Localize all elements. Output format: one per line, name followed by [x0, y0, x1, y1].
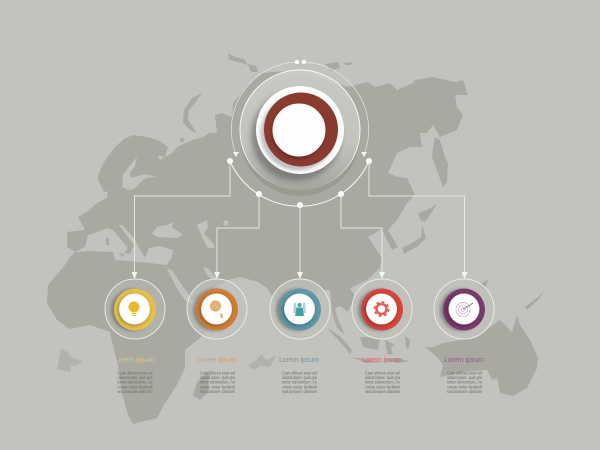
caption 5: Cras ultrices eros vel — [447, 370, 482, 375]
caption 5: tortor elementum. Ae — [447, 380, 483, 385]
icon: bulb — [128, 302, 140, 316]
central hub — [240, 70, 360, 196]
caption 2: ullamcorper, quis gra — [200, 375, 236, 380]
world map — [47, 53, 548, 424]
node 3: teal — [270, 279, 330, 339]
node 2: orange — [187, 279, 247, 339]
hub white centre — [273, 104, 325, 156]
caption 3: ullamcorper, quis gra — [282, 375, 318, 380]
caption 5: Lorem ipsum — [444, 357, 484, 364]
caption 3: Cras ultrices eros vel — [282, 370, 317, 375]
outer thin arc with top dots — [231, 60, 369, 157]
sea: Baltic — [122, 157, 157, 190]
sea: Aral — [223, 220, 229, 226]
caption 5: sed posuere diamom — [447, 389, 482, 394]
hub disc shadow — [251, 91, 341, 181]
caption 1: conse ctetur facilisoli — [118, 384, 153, 389]
sea: Red Sea — [167, 269, 193, 303]
sea: Mediterranean — [75, 225, 173, 265]
caption 3: Lorem ipsum — [279, 357, 319, 364]
caption 4 — [362, 357, 402, 394]
sea: Caspian — [197, 220, 215, 248]
sea: Black Sea — [152, 222, 183, 238]
hub white disc — [256, 86, 344, 174]
hub glass disc — [240, 70, 360, 190]
island clusters — [57, 349, 276, 372]
caption 5: conse ctetur facilisoli — [447, 384, 482, 389]
icon: gear — [374, 302, 388, 316]
node 5: purple — [434, 279, 494, 339]
hub white outline — [240, 70, 360, 190]
hub shadow crescent — [240, 76, 360, 196]
sea: Persian Gulf — [203, 267, 219, 279]
caption 1: sed posuere diamom — [118, 389, 153, 394]
caption 3: tortor elementum. Ae — [282, 380, 318, 385]
hub red ring shadow — [260, 96, 336, 170]
caption 4: tortor elementum. Ae — [365, 380, 401, 385]
node 4: red — [352, 279, 412, 339]
caption 3: sed posuere diamom — [282, 389, 317, 394]
icon: people — [293, 303, 306, 316]
caption 2 — [197, 357, 237, 394]
icon: target with arrow — [456, 302, 473, 316]
caption 2: tortor elementum. Ae — [200, 380, 236, 385]
landmass: Eurasia and Africa — [47, 70, 468, 424]
caption 5: ullamcorper, quis gra — [447, 375, 483, 380]
icon: dotted target — [210, 301, 223, 318]
hub inner shadow — [272, 106, 324, 158]
connectors and arrows — [132, 161, 468, 279]
caption 4: ullamcorper, quis gra — [365, 375, 401, 380]
caption 4: Lorem ipsum — [362, 357, 402, 364]
caption 1: ullamcorper, quis gra — [118, 375, 153, 380]
caption 1: Lorem ipsum — [115, 357, 155, 364]
hub red ring — [264, 92, 338, 166]
node 1: yellow — [105, 279, 165, 339]
caption 1: Cras ultrices eros vel — [118, 370, 153, 375]
caption 2: sed posuere diamom — [200, 389, 235, 394]
caption 4: conse ctetur facilisoli — [365, 384, 400, 389]
caption 4: Cras ultrices eros vel — [365, 370, 400, 375]
caption 1 — [115, 357, 155, 394]
caption 5 — [444, 357, 484, 394]
caption 2: Cras ultrices eros vel — [200, 370, 235, 375]
caption 2: conse ctetur facilisoli — [200, 384, 235, 389]
caption 3: conse ctetur facilisoli — [282, 384, 317, 389]
caption 3 — [279, 357, 319, 394]
caption 4: sed posuere diamom — [365, 389, 400, 394]
lower arc with nodes — [227, 158, 372, 208]
caption 1: tortor elementum. Ae — [118, 380, 153, 385]
caption 2: Lorem ipsum — [197, 357, 237, 364]
islands — [106, 53, 548, 400]
